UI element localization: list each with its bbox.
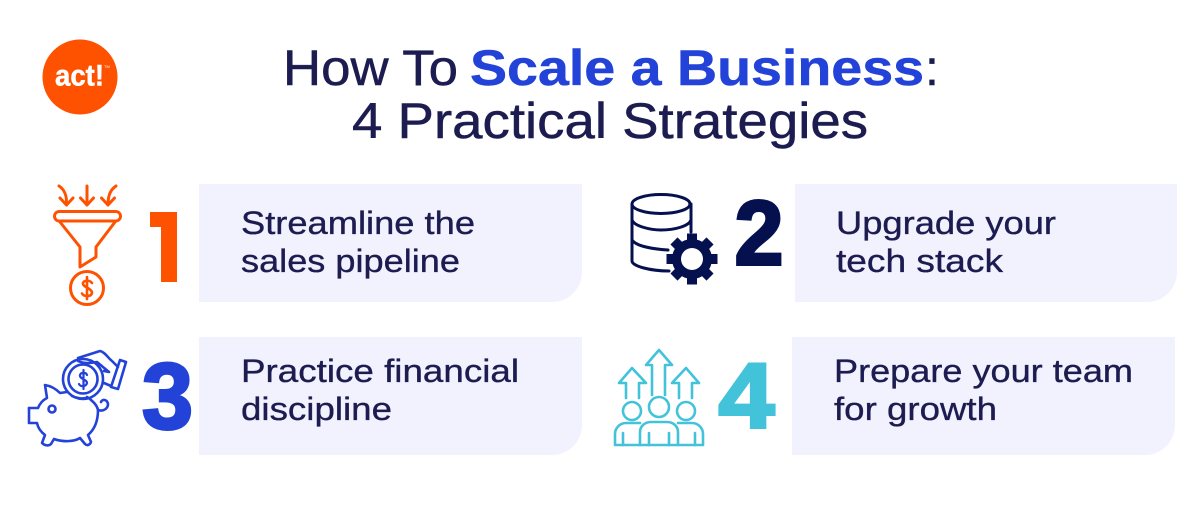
panel 2: upgrade your tech stack: [795, 184, 1177, 302]
panel 3: practice financial discipline: [199, 337, 582, 455]
title: [283, 40, 939, 149]
panel 4: prepare your team for growth: for growth: [834, 391, 997, 427]
panel 3: practice financial discipline: Practice financial: [241, 353, 519, 389]
panel 1: streamline the sales pipeline: [199, 184, 582, 302]
number 1: 1: [150, 193, 188, 303]
logo: act!: TM: [104, 64, 110, 69]
logo: act!: act!: [55, 60, 104, 92]
panel 4: prepare your team for growth: Prepare your team: [834, 353, 1133, 389]
title: How To: [283, 40, 458, 96]
logo: act!: [42, 40, 118, 114]
panel 1: streamline the sales pipeline: sales pipeline: [241, 243, 460, 279]
panel 2: upgrade your tech stack: Upgrade your: [836, 205, 1056, 241]
icon: funnel with coin: [54, 186, 120, 304]
icon: database with gear: [632, 194, 718, 284]
title: 4 Practical Strategies: [352, 93, 868, 149]
number 2: 2: [734, 182, 784, 284]
panel 4: prepare your team for growth: [792, 337, 1175, 455]
panel 1: streamline the sales pipeline: Streamline the: [241, 205, 475, 241]
number 3: 3: [142, 344, 193, 448]
icon: team with arrows: [615, 350, 703, 445]
panel 2: upgrade your tech stack: tech stack: [836, 243, 1004, 279]
panel 3: practice financial discipline: discipline: [241, 391, 392, 427]
title: Scale a Business: [470, 40, 924, 96]
number 1: [150, 212, 177, 282]
icon: piggy bank with coin and hand: [29, 351, 126, 445]
title: :: [925, 40, 939, 96]
number 4: 4: [718, 346, 774, 448]
